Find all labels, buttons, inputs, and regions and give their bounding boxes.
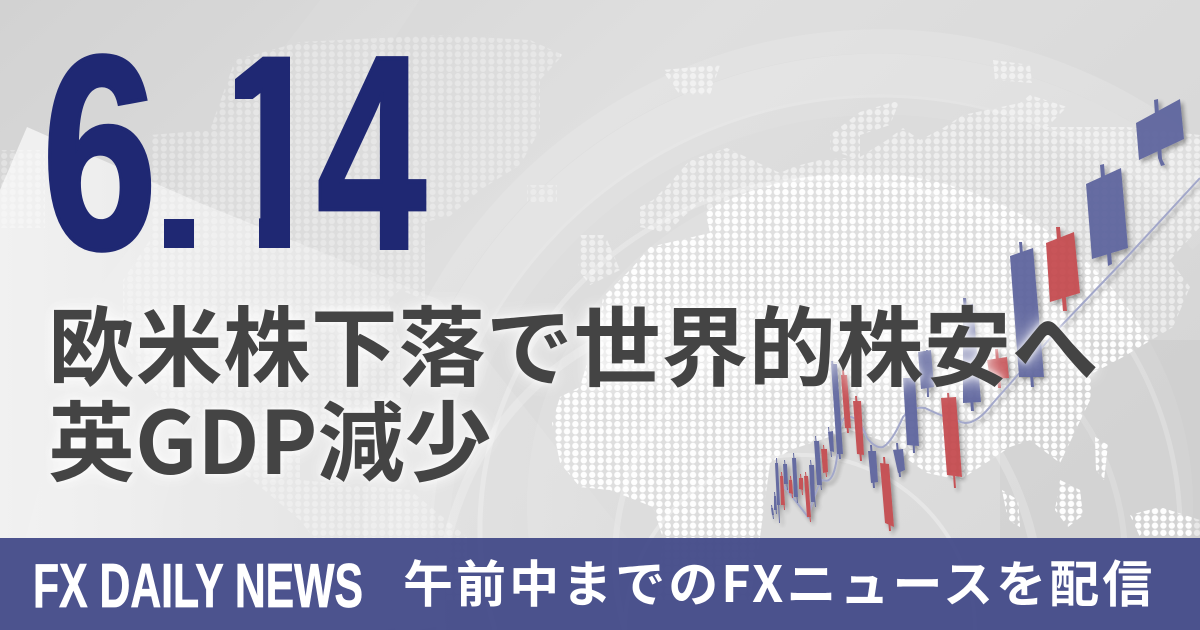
- blue candles: [771, 99, 1184, 523]
- banner tagline: 午前中までのFXニュースを配信: [403, 545, 1155, 617]
- bottom banner: FX DAILY NEWS: [33, 552, 363, 621]
- date: 6.14: [48, 53, 426, 253]
- date: 6.14: .: [149, 0, 208, 307]
- date: 6.14: 6: [42, 0, 157, 307]
- heading line 2: 英GDP減少: [48, 374, 492, 500]
- heading line 1: 欧米株下落で世界的株安へ: [48, 279, 1099, 405]
- trend line: [783, 178, 1200, 517]
- red candles: [780, 227, 1080, 531]
- date: 6.14: 4: [317, 0, 426, 307]
- date: 6.14: 1: [210, 0, 333, 307]
